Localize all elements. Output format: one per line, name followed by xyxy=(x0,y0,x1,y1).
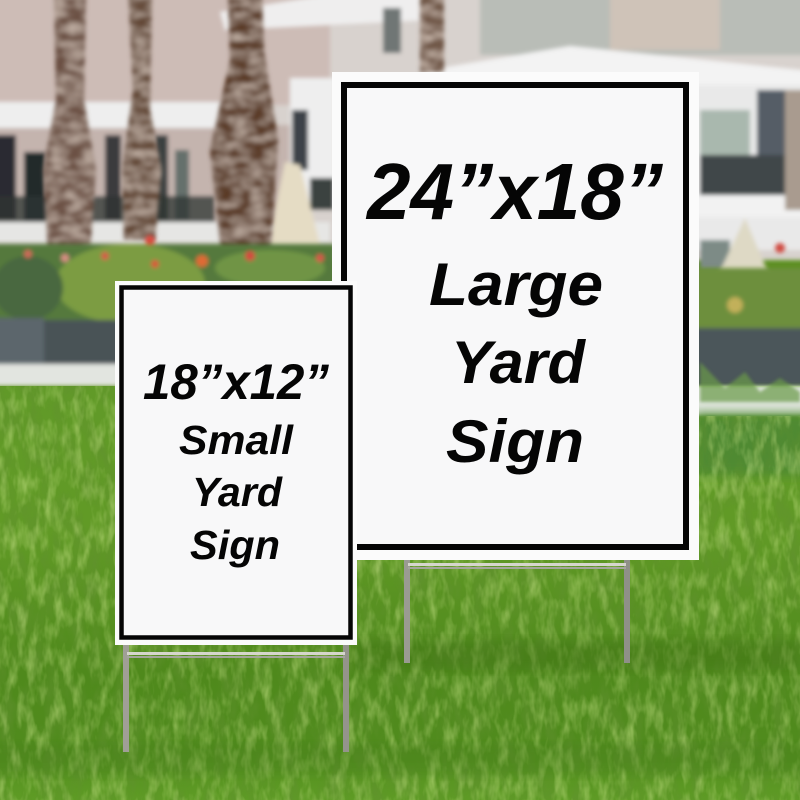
small sign label: Sign: Sign xyxy=(190,522,280,568)
large sign panel xyxy=(332,72,699,560)
small sign size heading: 18”x12” xyxy=(143,354,329,410)
background: grass lawn xyxy=(0,362,800,800)
small sign stand xyxy=(123,645,349,752)
small sign panel xyxy=(115,281,357,645)
large sign stand xyxy=(404,560,630,663)
small sign label: Small: Small xyxy=(179,417,295,463)
background: blurred palm trunks xyxy=(43,0,444,262)
background: flower beds and planters xyxy=(0,235,800,386)
large sign size heading: 24”x18” xyxy=(365,147,663,236)
large sign label: Sign: Sign xyxy=(446,408,584,475)
large sign label: Large: Large xyxy=(429,251,603,318)
large sign label: Yard: Yard xyxy=(451,329,586,396)
small sign label: Yard: Yard xyxy=(192,469,283,515)
background: blurred building xyxy=(0,0,800,282)
